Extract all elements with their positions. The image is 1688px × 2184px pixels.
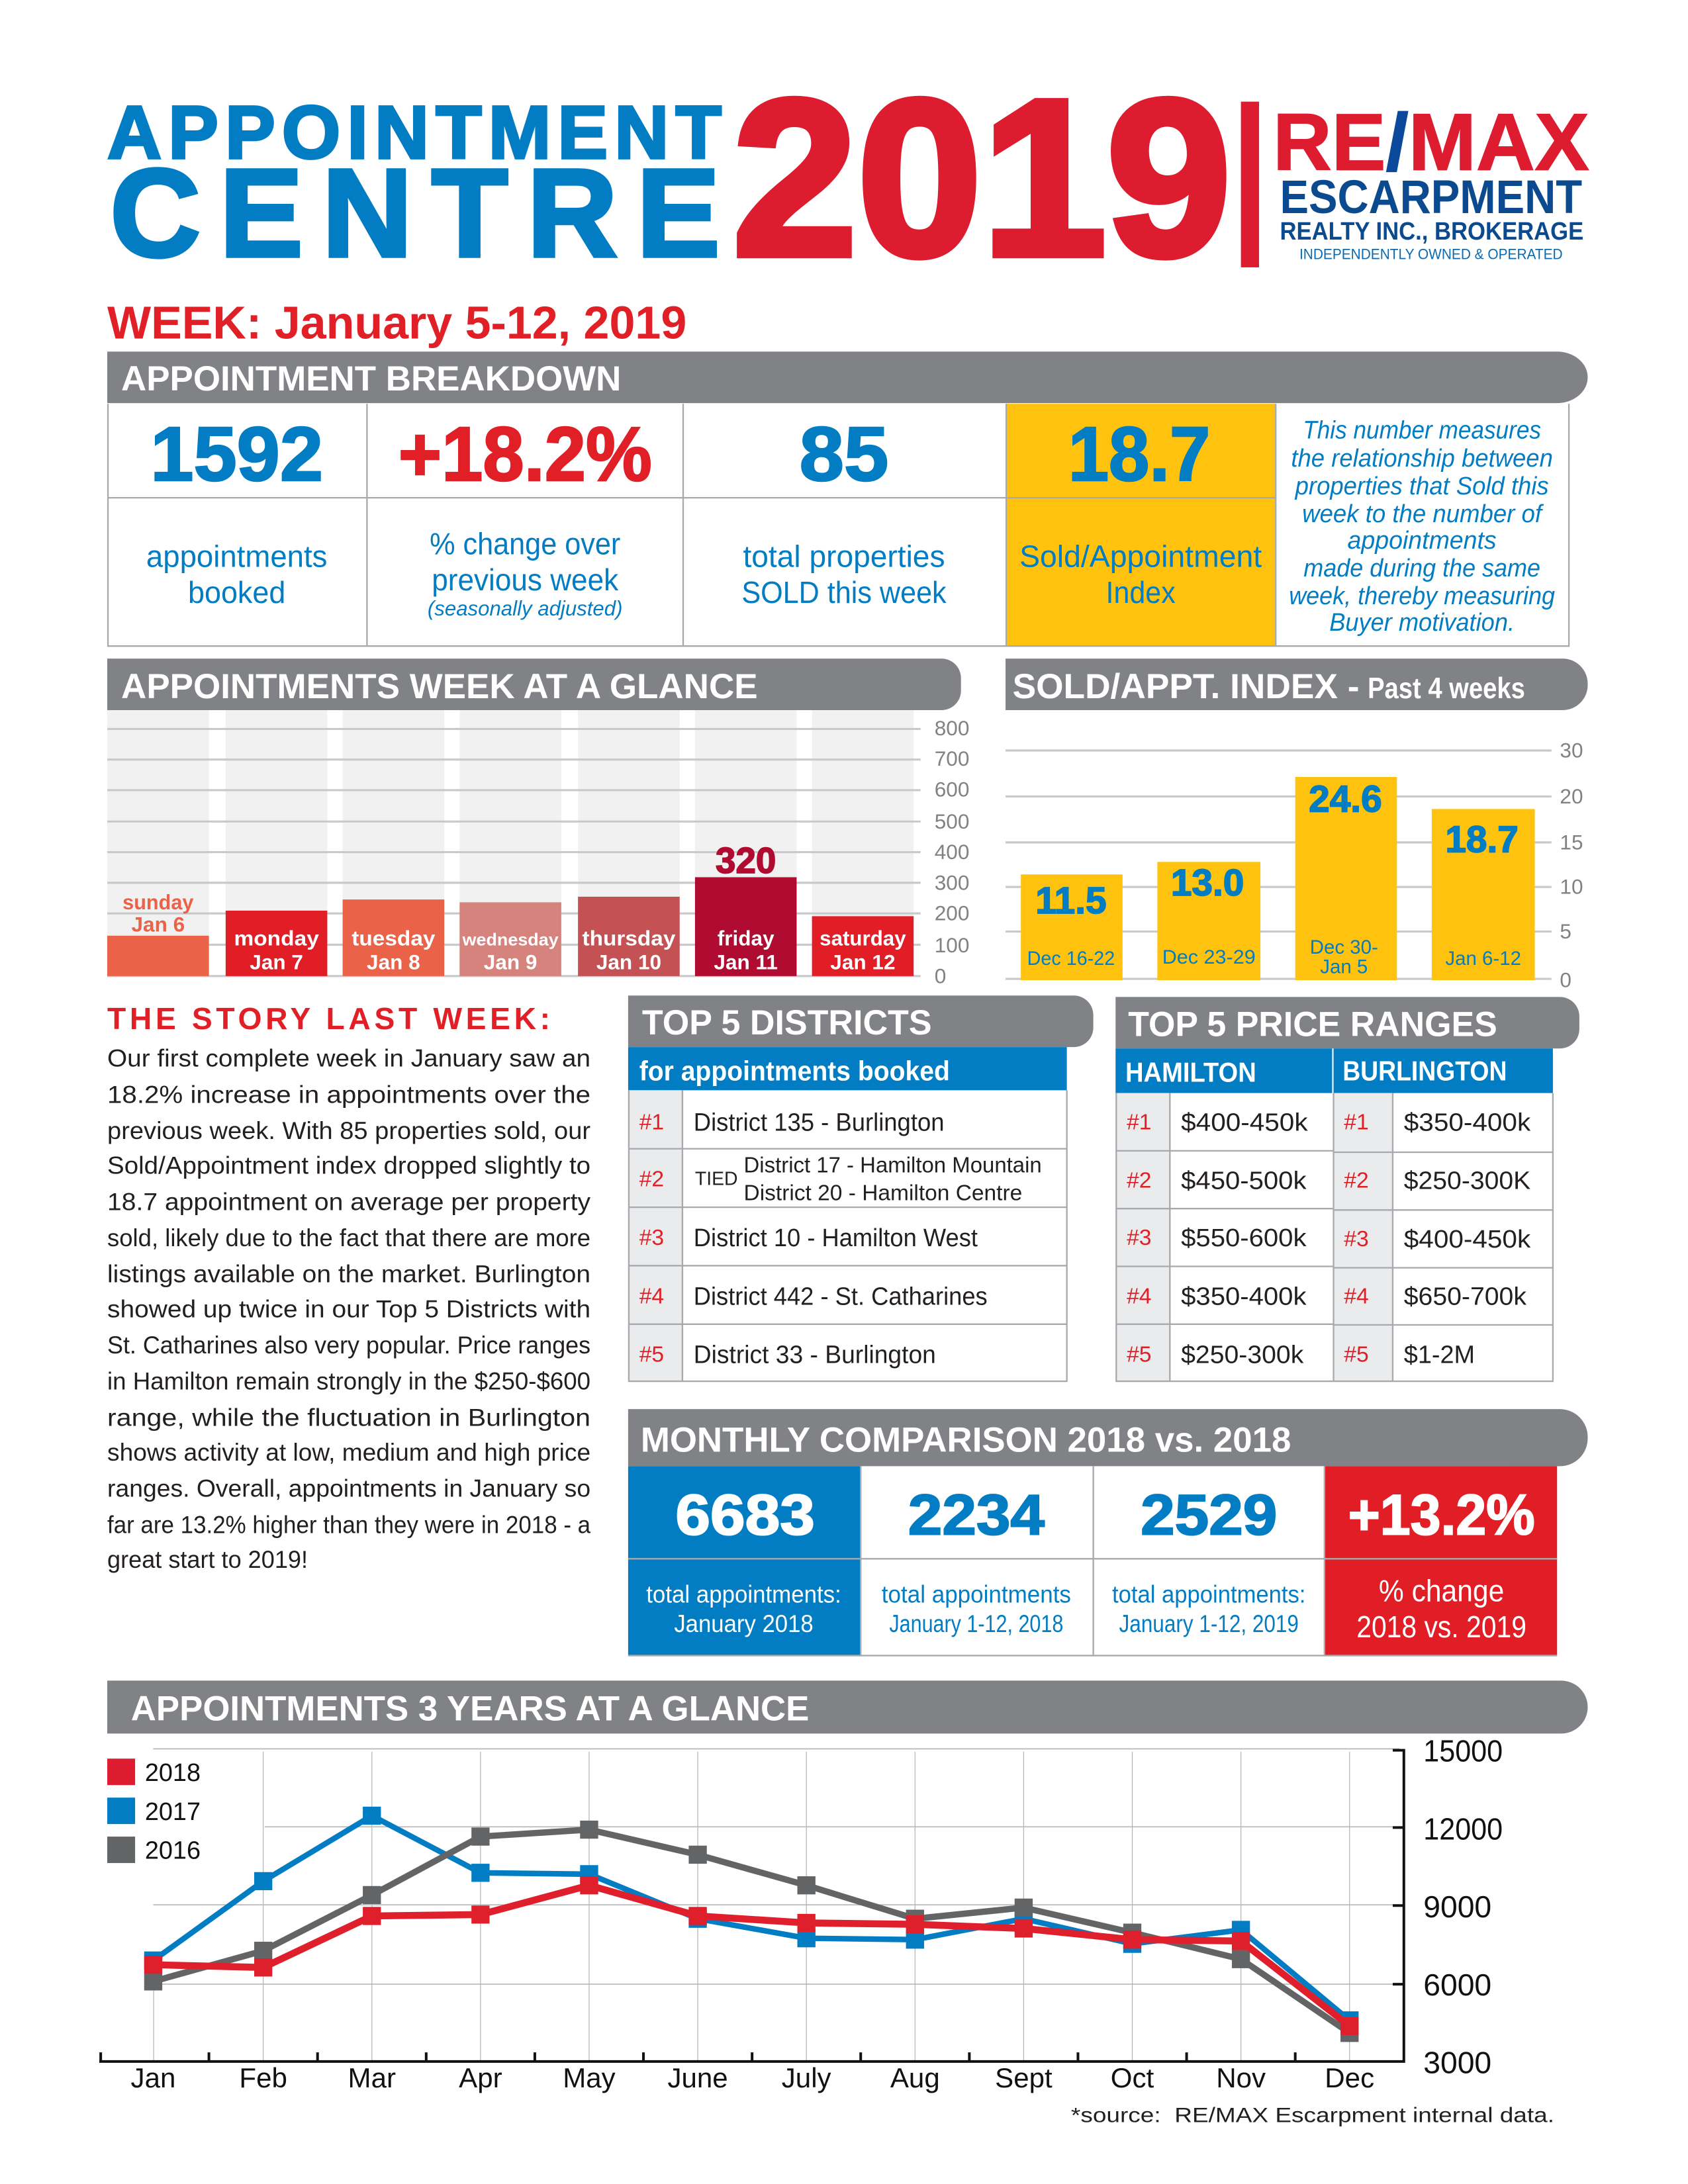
y axis labels: 100	[935, 933, 969, 957]
source note: *source: RE/MAX Escarpment internal data.	[1071, 2103, 1554, 2126]
panel: appointments 3 years at a glance	[99, 1680, 1587, 2093]
x axis month labels: Aug	[890, 2062, 940, 2093]
bar: saturday	[812, 916, 914, 976]
stat: 1592 appointments booked: booked	[188, 575, 285, 610]
stat: 1592 appointments booked: appointments	[146, 539, 327, 573]
y axis labels: 15000	[1423, 1733, 1503, 1768]
Hamilton ranges: #5	[1127, 1343, 1152, 1367]
subheading: Hamilton and Burlington: BURLINGTON	[1342, 1056, 1507, 1087]
heading: 3 years at a glance	[107, 1680, 1587, 1733]
Hamilton ranges: #1	[1127, 1110, 1152, 1134]
bar: tuesday: Jan 8	[367, 950, 420, 974]
explanatory note: properties that Sold this	[1295, 473, 1549, 500]
bar: wednesday: wednesday	[462, 930, 559, 950]
x axis month labels: Jan	[131, 2062, 175, 2093]
story paragraph: Sold/Appointment index dropped slightly to	[107, 1152, 590, 1179]
story paragraph: range, while the fluctuation in Burlington	[107, 1404, 590, 1431]
Burlington ranges	[1344, 1109, 1530, 1369]
cell: +13.2%: % change	[1379, 1574, 1504, 1608]
bar: Dec 23-29	[1157, 862, 1260, 980]
y axis labels	[935, 716, 969, 987]
rank column	[628, 1090, 682, 1381]
bar: tuesday: tuesday	[352, 927, 436, 950]
heading: week at a glance: APPOINTMENTS WEEK AT A GLANCE	[121, 667, 758, 706]
cell: +13.2%	[1325, 1466, 1557, 1656]
bar: thursday: thursday	[582, 927, 676, 950]
logo: RE/MAX Escarpment: ESCARPMENT	[1280, 171, 1582, 224]
y axis labels: 12000	[1423, 1811, 1503, 1846]
stat: 18.7 index: Index	[1106, 575, 1176, 610]
stat: +18.2% change: +18.2%	[399, 411, 652, 497]
stat: 85 properties sold: SOLD this week	[741, 575, 947, 610]
y axis labels: 0	[935, 964, 946, 987]
heading: sold/appt index: SOLD/APPT. INDEX -	[1013, 667, 1359, 706]
heading: the story last week: THE STORY LAST WEEK:	[107, 1001, 550, 1036]
bar: monday: Jan 7	[250, 950, 303, 974]
story paragraph: 18.7 appointment on average per property	[107, 1188, 591, 1215]
legend: 2017	[145, 1798, 201, 1826]
stat: 1592 appointments booked: 1592	[150, 411, 323, 497]
row 2 tied: TIED	[695, 1168, 738, 1189]
y axis labels: 800	[935, 716, 969, 740]
x axis month labels: Sept	[995, 2062, 1053, 2093]
row 3: District 10 - Hamilton West	[694, 1224, 978, 1252]
y axis labels: 9000	[1423, 1889, 1491, 1924]
logo divider bar	[1241, 102, 1259, 267]
line series: 2016	[144, 1821, 1358, 2042]
heading: top 5 price ranges	[1115, 997, 1579, 1048]
explanatory note: the relationship between	[1291, 445, 1553, 473]
Hamilton ranges: $550-600k	[1181, 1224, 1307, 1252]
Hamilton ranges: #4	[1127, 1284, 1152, 1308]
heading: top 5 price ranges: TOP 5 PRICE RANGES	[1128, 1005, 1497, 1044]
story paragraph: listings available on the market. Burlington	[107, 1261, 590, 1288]
row 4: District 442 - St. Catharines	[694, 1283, 988, 1310]
cell: +13.2%: +13.2%	[1348, 1484, 1535, 1547]
story paragraph: in Hamilton remain strongly in the $250-$600	[107, 1368, 590, 1395]
row 2 tied	[639, 1154, 1042, 1206]
title: Appointment Centre 2019: APPOINTMENT	[107, 91, 722, 175]
story paragraph	[107, 1045, 591, 1573]
heading: monthly comparison: MONTHLY COMPARISON 2018 vs. 2018	[641, 1420, 1291, 1459]
subheading: for appointments booked: for appointments booked	[639, 1056, 950, 1087]
cell: 2234: 2234	[908, 1484, 1045, 1547]
bar: Dec 16-22: 11.5	[1035, 880, 1107, 922]
cell: 2529: January 1-12, 2019	[1119, 1610, 1299, 1637]
bar: Dec 16-22: Dec 16-22	[1027, 948, 1115, 970]
logo: RE/MAX Escarpment	[1273, 97, 1589, 262]
stat: 85 properties sold: 85	[800, 411, 888, 497]
logo: RE/MAX Escarpment: RE/MAX	[1273, 97, 1589, 187]
bar: friday: Jan 11	[714, 950, 778, 974]
cell: 6683: January 2018	[674, 1610, 814, 1637]
story paragraph: ranges. Overall, appointments in January so	[107, 1475, 590, 1502]
heading: 3 years at a glance: APPOINTMENTS 3 YEARS AT A GLANCE	[131, 1689, 809, 1728]
x axis month labels: May	[563, 2062, 616, 2093]
row 1: District 135 - Burlington	[694, 1109, 944, 1136]
cell: 2234: total appointments	[882, 1581, 1071, 1608]
bar: tuesday	[343, 899, 444, 976]
bar: Jan 6-12: 18.7	[1445, 819, 1519, 861]
cell: 6683	[628, 1466, 861, 1656]
Hamilton ranges: $450-500k	[1181, 1167, 1307, 1195]
explanatory note: appointments	[1348, 527, 1497, 555]
panel: top 5 districts	[628, 995, 1094, 1381]
x axis month labels: June	[667, 2062, 728, 2093]
week heading: WEEK: January 5-12, 2019	[107, 296, 686, 348]
stat: +18.2% change: % change over	[430, 526, 620, 561]
story paragraph: sold, likely due to the fact that there are more	[107, 1224, 590, 1251]
Burlington ranges: #3	[1344, 1227, 1369, 1251]
bar: Dec 16-22	[1021, 874, 1123, 980]
bar: Dec 30-Jan 5: Dec 30-	[1310, 936, 1378, 958]
y axis labels: 0	[1560, 968, 1571, 992]
bar: sunday: Jan 6	[131, 913, 185, 936]
line series: 2017	[144, 1807, 1358, 2029]
row 1: #1	[639, 1110, 664, 1134]
explanatory note: Buyer motivation.	[1329, 609, 1515, 637]
y axis labels: 700	[935, 747, 969, 770]
panel: sold/appt index past 4 weeks	[1006, 659, 1587, 992]
row 5: #5	[639, 1343, 664, 1367]
y axis labels: 5	[1560, 919, 1571, 943]
bar: monday: monday	[234, 927, 319, 950]
stat: +18.2% change: (seasonally adjusted)	[428, 596, 622, 620]
title: Appointment Centre 2019	[107, 54, 1231, 302]
cell: 6683: total appointments:	[646, 1581, 841, 1608]
story paragraph: 18.2% increase in appointments over the	[107, 1081, 590, 1108]
x axis month labels: Nov	[1216, 2062, 1266, 2093]
logo: RE/MAX Escarpment: REALTY INC., BROKERAGE	[1280, 218, 1583, 246]
bar: thursday	[578, 897, 680, 976]
explanatory note: week, thereby measuring	[1289, 582, 1555, 610]
cell: 2234	[882, 1484, 1071, 1637]
story paragraph: showed up twice in our Top 5 Districts with	[107, 1295, 590, 1322]
y axis labels: 500	[935, 809, 969, 833]
line series: 2018	[144, 1876, 1358, 2035]
y axis labels: 200	[935, 901, 969, 925]
title: Appointment Centre 2019: CENTRE	[110, 144, 720, 283]
story paragraph: far are 13.2% higher than they were in 2018 - a	[107, 1511, 591, 1538]
y axis labels: 15	[1560, 830, 1583, 854]
heading: appointment breakdown	[107, 351, 1587, 403]
explanatory note: This number measures	[1303, 417, 1541, 445]
heading: monthly comparison	[628, 1409, 1587, 1466]
cell: 2529: 2529	[1141, 1484, 1277, 1547]
bar: monday	[226, 911, 327, 976]
y axis labels: 600	[935, 777, 969, 801]
x axis month labels	[131, 2062, 1374, 2093]
Hamilton ranges	[1127, 1109, 1308, 1369]
bar: Dec 23-29: Dec 23-29	[1162, 946, 1256, 968]
legend: 2018	[145, 1759, 201, 1787]
bar: Jan 6-12	[1432, 809, 1535, 980]
bar: Dec 30-Jan 5: Jan 5	[1320, 956, 1368, 978]
panel: appointments week at a glance	[107, 659, 969, 987]
x axis month labels: Dec	[1325, 2062, 1374, 2093]
x axis month labels: July	[782, 2062, 831, 2093]
text block: the story last week	[107, 1001, 591, 1573]
subheading: for appointments booked	[628, 1047, 1067, 1090]
stat: 85 properties sold: total properties	[743, 539, 945, 573]
explanatory note: week to the number of	[1302, 500, 1544, 528]
chart axes	[99, 1751, 1404, 2062]
Burlington ranges: #4	[1344, 1284, 1369, 1308]
x axis month labels: Feb	[239, 2062, 287, 2093]
cell: 2529	[1112, 1484, 1305, 1637]
bar: wednesday	[459, 902, 561, 976]
bar: sunday	[107, 890, 209, 976]
y axis labels: 400	[935, 840, 969, 864]
heading: top 5 districts	[628, 995, 1094, 1047]
stat: 18.7 index: 18.7	[1068, 411, 1210, 497]
title: Appointment Centre 2019: 2019	[733, 54, 1231, 302]
story paragraph: previous week. With 85 properties sold, our	[107, 1117, 590, 1144]
bar: saturday: saturday	[820, 927, 906, 950]
bar: Dec 23-29: 13.0	[1171, 862, 1244, 904]
stat: +18.2% change: previous week	[432, 563, 619, 597]
x axis month labels: Apr	[459, 2062, 502, 2093]
panel: top 5 price ranges	[1115, 997, 1579, 1381]
Burlington ranges: $250-300K	[1404, 1167, 1530, 1195]
bar: thursday: Jan 10	[596, 950, 661, 974]
explanatory note: made during the same	[1303, 555, 1540, 582]
heading: week at a glance	[107, 659, 961, 710]
stat: +18.2% change	[399, 411, 652, 620]
column backgrounds	[107, 710, 914, 976]
panel: monthly comparison	[628, 1409, 1587, 1656]
story paragraph: Our first complete week in January saw an	[107, 1045, 590, 1072]
table grid	[108, 404, 1569, 646]
bar: saturday: Jan 12	[830, 950, 896, 974]
y axis labels: 30	[1560, 739, 1583, 762]
bar: friday: 320	[716, 840, 776, 881]
y axis labels: 300	[935, 870, 969, 894]
heading: sold/appt index	[1006, 659, 1587, 710]
Hamilton ranges: $350-400k	[1181, 1283, 1307, 1310]
cell: 6683: 6683	[675, 1484, 815, 1547]
x axis month labels: Oct	[1111, 2062, 1154, 2093]
y axis labels	[1423, 1733, 1503, 2080]
stat: 18.7 index	[1019, 411, 1262, 610]
row 3: #3	[639, 1226, 664, 1250]
bar: sunday: sunday	[122, 890, 194, 914]
bar: Dec 30-Jan 5	[1295, 777, 1397, 980]
legend: 2016	[145, 1837, 201, 1865]
rank columns	[1115, 1093, 1393, 1381]
explanatory note	[1289, 417, 1555, 637]
y axis labels: 20	[1560, 784, 1583, 808]
story paragraph: shows activity at low, medium and high price	[107, 1439, 590, 1466]
stat: 85 properties sold	[741, 411, 947, 610]
subheading: Hamilton and Burlington: HAMILTON	[1125, 1057, 1256, 1088]
Burlington ranges: $650-700k	[1404, 1283, 1526, 1310]
subheading: Hamilton and Burlington	[1115, 1048, 1553, 1093]
y axis labels: 3000	[1423, 2046, 1491, 2080]
legend	[107, 1758, 201, 1865]
cell: +13.2%: 2018 vs. 2019	[1356, 1610, 1526, 1644]
bar: friday: friday	[718, 927, 774, 950]
story paragraph: great start to 2019!	[107, 1546, 308, 1573]
bar: wednesday: Jan 9	[484, 950, 537, 974]
logo: RE/MAX Escarpment: INDEPENDENTLY OWNED & OPERATED	[1299, 246, 1563, 262]
heading: appointment breakdown: APPOINTMENT BREAKDOWN	[121, 359, 621, 398]
panel: appointment breakdown	[107, 351, 1587, 646]
stat: 18.7 index: Sold/Appointment	[1019, 539, 1262, 573]
y axis labels: 10	[1560, 875, 1583, 899]
cell: 2234: January 1-12, 2018	[889, 1610, 1063, 1637]
heading: sold/appt index: Past 4 weeks	[1368, 672, 1525, 705]
Hamilton ranges: $400-450k	[1181, 1109, 1308, 1136]
story paragraph: St. Catharines also very popular. Price ranges	[107, 1332, 590, 1359]
y axis labels: 6000	[1423, 1968, 1491, 2002]
bar: friday	[695, 840, 796, 976]
cell: 2529: total appointments:	[1112, 1581, 1305, 1608]
Hamilton ranges: #2	[1127, 1169, 1152, 1193]
bar: Dec 30-Jan 5: 24.6	[1309, 779, 1382, 821]
bar: Jan 6-12: Jan 6-12	[1445, 948, 1521, 970]
Burlington ranges: $350-400k	[1404, 1109, 1530, 1136]
row 4: #4	[639, 1284, 664, 1308]
Hamilton ranges: #3	[1127, 1226, 1152, 1250]
row 5: District 33 - Burlington	[694, 1342, 936, 1369]
Burlington ranges: #1	[1344, 1110, 1369, 1134]
y axis labels	[1560, 739, 1583, 992]
Hamilton ranges: $250-300k	[1181, 1342, 1303, 1369]
Burlington ranges: $1-2M	[1404, 1342, 1475, 1369]
x axis month labels: Mar	[348, 2062, 396, 2093]
row 2 tied: District 17 - Hamilton Mountain	[744, 1154, 1042, 1178]
row 2 tied: District 20 - Hamilton Centre	[744, 1181, 1022, 1206]
highlighted index cell background	[1006, 404, 1276, 646]
Burlington ranges: $400-450k	[1404, 1226, 1530, 1253]
Burlington ranges: #5	[1344, 1343, 1369, 1367]
heading: top 5 districts: TOP 5 DISTRICTS	[642, 1003, 932, 1042]
stat: 1592 appointments booked	[146, 411, 327, 610]
Burlington ranges: #2	[1344, 1169, 1369, 1193]
row 2 tied: #2	[639, 1167, 664, 1192]
